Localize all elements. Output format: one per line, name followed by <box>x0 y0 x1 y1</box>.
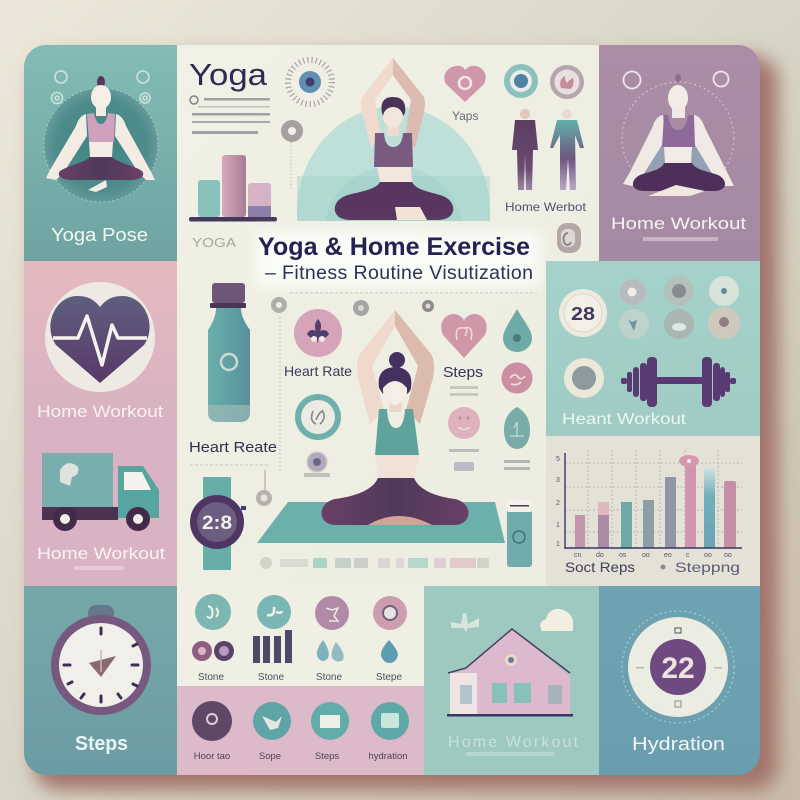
icon row: faded chips <box>260 557 489 569</box>
axis labels: do <box>596 552 604 559</box>
labels: Stone <box>198 672 225 683</box>
icon: pink heart <box>444 66 486 102</box>
icon: dial 28: 28 <box>571 304 595 324</box>
panel: heart <box>24 261 177 587</box>
icon: pink badge <box>502 362 532 394</box>
label: steps: Steps <box>443 364 483 381</box>
icon: dumbbell <box>621 357 736 407</box>
labels: Stone <box>258 672 285 683</box>
axis labels: 1 <box>556 541 560 548</box>
icon: dial: 22 <box>661 652 695 685</box>
axis labels: 1 <box>556 522 560 529</box>
labels: Stone <box>316 672 343 683</box>
icons: top circles <box>195 594 407 630</box>
icons: second row <box>192 630 398 663</box>
chart legend <box>565 559 740 575</box>
icon: small marker <box>281 120 303 190</box>
label: home workout: Home Werbot <box>505 200 587 214</box>
label: home workout: Home Workout <box>611 214 746 233</box>
icon: supplement tube <box>507 500 532 567</box>
figure: upper yoga pose <box>335 58 453 220</box>
icon: dial 28 <box>559 289 607 337</box>
label: steps: Steps <box>75 733 128 755</box>
icon: small dial <box>256 470 272 506</box>
panel: mint workout <box>546 261 760 436</box>
icon: rounded tile <box>557 223 581 253</box>
heading: yoga: Yoga <box>189 57 268 92</box>
axis labels <box>556 456 732 559</box>
icon: smart watch <box>190 477 246 570</box>
icon: heart with pulse <box>50 296 150 383</box>
illustration: semicircle backdrop <box>297 106 490 221</box>
label: hydration: Hydration <box>632 734 725 754</box>
label: heart rate: Heart Rate <box>284 363 352 379</box>
panel: delivery truck <box>37 453 165 570</box>
icon: water drop <box>503 309 532 352</box>
icons: round badges <box>192 701 409 741</box>
icon: pink smile badge <box>448 407 480 439</box>
icon: smart watch: 2:8 <box>202 513 232 534</box>
icon: grey badge <box>564 358 604 398</box>
text block: yoga notes <box>190 96 270 134</box>
panel: house <box>424 586 599 775</box>
icon: stopwatch <box>51 605 151 715</box>
icon: shield drop <box>504 407 530 449</box>
label: heart rate: Heart Reate <box>189 439 277 456</box>
title: – Fitness Routine Visutization <box>265 262 533 284</box>
labels: hydration <box>368 751 408 762</box>
icon: small spiral badges <box>52 71 150 104</box>
icon: standing persons <box>512 109 584 190</box>
figure: main yoga pose <box>322 310 468 525</box>
chart grid <box>565 450 742 548</box>
labels <box>194 751 408 762</box>
icon: teal stethoscope badge <box>295 394 341 440</box>
label: yoga pose: Yoga Pose <box>51 225 148 245</box>
label: home workout: Home Workout <box>37 402 163 421</box>
icon: teal badge <box>504 64 538 98</box>
axis labels: cn <box>574 552 582 559</box>
axis labels: oo <box>724 552 732 559</box>
axis labels: eo <box>664 552 672 559</box>
icon: dial <box>628 617 728 717</box>
labels: Hoor tao <box>194 751 230 762</box>
icon: flower badge <box>294 309 342 357</box>
panel: icon row pink <box>177 686 424 775</box>
figure: seated yoga pose <box>46 76 155 192</box>
label: steps: Yaps <box>452 109 478 123</box>
labels <box>198 672 403 683</box>
labels: Sope <box>259 751 281 762</box>
figure: seated pose <box>623 74 734 196</box>
chart legend: Steppng <box>675 559 740 575</box>
icon: sun burst <box>288 60 332 104</box>
icon: small grey badge <box>304 452 330 477</box>
mat <box>257 502 505 543</box>
panel: yoga pose <box>24 45 177 261</box>
axis labels: 2 <box>556 500 560 507</box>
text block: faded labels <box>449 449 530 471</box>
panel: icon row stone <box>177 586 424 686</box>
chart legend: Soct Reps <box>565 559 635 575</box>
axis labels: oo <box>642 552 650 559</box>
panel: hydration <box>599 586 760 775</box>
axis labels: 5 <box>556 456 560 463</box>
icon: circles <box>624 72 728 88</box>
panel: centre <box>177 45 600 587</box>
icon: cloud <box>540 609 573 631</box>
label: home workout: Home Workout <box>448 734 579 751</box>
icon: mauve badge <box>550 65 584 99</box>
title <box>258 237 532 279</box>
title: Yoga & Home Exercise <box>258 233 530 261</box>
panel: home workout pose <box>599 45 760 261</box>
icon: house <box>447 629 573 716</box>
panel: timer <box>24 586 177 775</box>
label: small logo: YOGA <box>192 235 236 250</box>
axis labels: c <box>686 552 690 559</box>
label: home workout: Home Workout <box>37 544 165 563</box>
chart axes <box>565 453 742 549</box>
icon: heart outline <box>441 314 487 358</box>
icon: water bottle <box>208 283 250 422</box>
labels: Stepe <box>376 672 403 683</box>
label: heart workout: Heant Workout <box>562 411 687 428</box>
chart: small bars <box>189 155 277 222</box>
icon: truck <box>42 453 159 531</box>
chart bars <box>575 455 736 548</box>
labels: Steps <box>315 751 339 762</box>
axis labels: oo <box>704 552 712 559</box>
axis labels: 3 <box>556 477 560 484</box>
icon: small windmill <box>451 613 479 632</box>
panel: bar chart <box>546 436 760 587</box>
icon: six small badges <box>619 276 740 339</box>
axis labels: os <box>619 552 627 559</box>
